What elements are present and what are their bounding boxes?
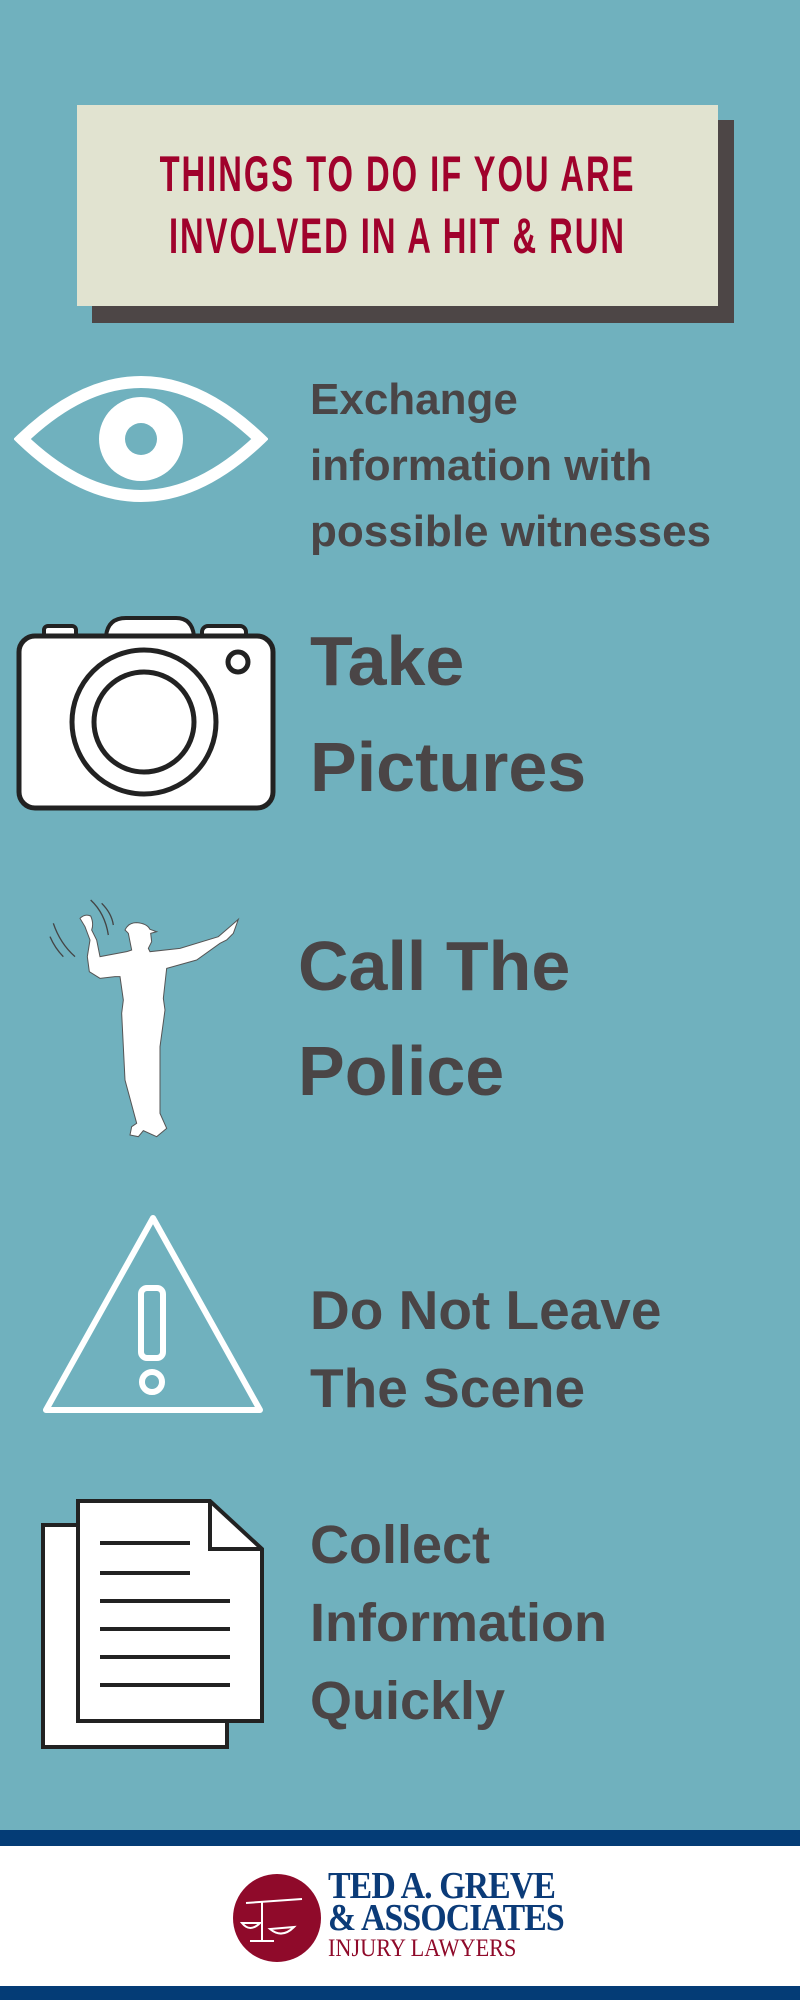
text: collect information quickly [310, 1515, 607, 1731]
logo: firm name: TED A. GREVE [328, 1865, 555, 1907]
icon: camera [16, 616, 276, 810]
logo: scales emblem [233, 1874, 321, 1962]
footer [0, 1830, 800, 2000]
icon: warning triangle [43, 1215, 263, 1413]
text: do not leave the scene: Do Not Leave [310, 1279, 661, 1341]
icon: documents [41, 1499, 264, 1749]
title text [160, 146, 635, 264]
text: collect information quickly: Quickly [310, 1671, 505, 1731]
logo: firm name: & ASSOCIATES [328, 1897, 564, 1939]
title text: INVOLVED IN A HIT & RUN [169, 208, 626, 264]
text: call the police: Police [298, 1032, 504, 1110]
title text: THINGS TO DO IF YOU ARE [160, 146, 635, 202]
text: take pictures: Pictures [310, 728, 586, 806]
logo: firm name [328, 1865, 564, 1939]
text: do not leave the scene [310, 1279, 661, 1419]
text: collect information quickly: Collect [310, 1515, 490, 1575]
title box [77, 105, 718, 306]
text: exchange information: information with [310, 441, 652, 490]
text: exchange information: possible witnesses [310, 507, 711, 556]
text: exchange information [310, 375, 711, 556]
title shadow [92, 120, 734, 323]
text: exchange information: Exchange [310, 375, 518, 424]
text: call the police: Call The [298, 927, 570, 1005]
logo: injury lawyers: INJURY LAWYERS [328, 1935, 516, 1962]
text: take pictures: Take [310, 622, 464, 700]
icon: eye [14, 376, 268, 502]
text: collect information quickly: Information [310, 1593, 607, 1653]
icon: police officer directing [50, 900, 240, 1138]
text: do not leave the scene: The Scene [310, 1357, 585, 1419]
text: take pictures [310, 622, 586, 806]
text: call the police [298, 927, 570, 1110]
